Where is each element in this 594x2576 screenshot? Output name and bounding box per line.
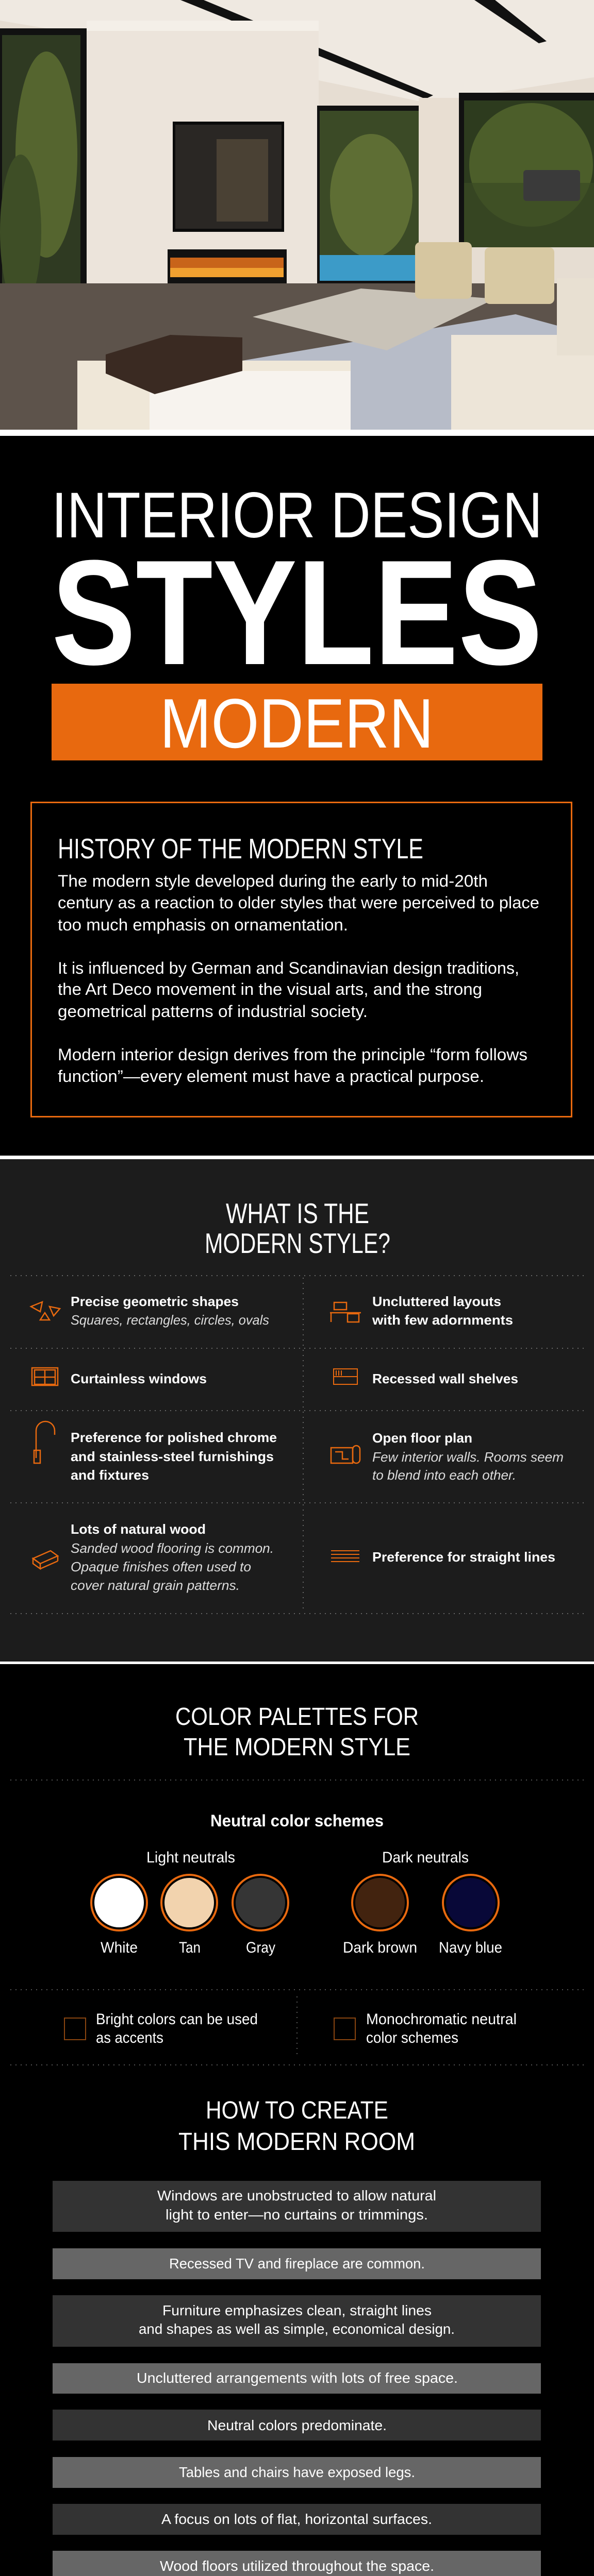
feature: uncluttered layouts: Uncluttered layouts xyxy=(372,1294,501,1309)
note: bright colors accents: Bright colors can be used xyxy=(96,2011,258,2028)
feature: curtainless windows xyxy=(32,1368,207,1386)
bar 5 xyxy=(53,2410,541,2441)
heading: what is the modern style xyxy=(205,1197,390,1259)
feature: natural wood xyxy=(33,1521,274,1593)
feature: open floor plan: Few interior walls. Rooms seem xyxy=(372,1449,564,1465)
feature: precise geometric shapes: Precise geometric shapes xyxy=(71,1294,239,1309)
feature: polished chrome: Preference for polished chrome xyxy=(71,1430,277,1445)
feature: polished chrome: and fixtures xyxy=(71,1467,149,1483)
history body: Modern interior design derives from the principle “form follows xyxy=(58,1045,527,1064)
feature: natural wood: Lots of natural wood xyxy=(71,1521,206,1537)
bar 3: and shapes as well as simple, economical design. xyxy=(139,2321,455,2337)
history body: century as a reaction to older styles that were perceived to place xyxy=(58,893,539,912)
swatch: gray xyxy=(233,1875,288,1956)
note: monochromatic xyxy=(334,2011,517,2046)
note: bright colors accents: as accents xyxy=(96,2029,163,2046)
note: bright colors accents xyxy=(64,2011,258,2046)
bar 1 xyxy=(53,2181,541,2232)
heading: what is the modern style: MODERN STYLE? xyxy=(205,1227,390,1259)
feature: natural wood: cover natural grain patterns. xyxy=(71,1578,240,1593)
group: light neutrals: Light neutrals xyxy=(146,1849,235,1866)
swatch: gray: Gray xyxy=(246,1939,275,1956)
heading: how to create: THIS MODERN ROOM xyxy=(178,2128,415,2156)
swatch: tan: Tan xyxy=(179,1939,201,1956)
feature: precise geometric shapes xyxy=(31,1294,269,1328)
bar 4: Uncluttered arrangements with lots of free space. xyxy=(137,2370,458,2386)
history body: function”—every element must have a practical purpose. xyxy=(58,1067,484,1086)
bar 2 xyxy=(53,2248,541,2279)
bar 3 xyxy=(53,2295,541,2347)
icon: faucet xyxy=(34,1421,55,1463)
swatch: white: White xyxy=(101,1939,138,1956)
icon: wood plank xyxy=(33,1551,58,1569)
bar 8: Wood floors utilized throughout the space. xyxy=(160,2558,434,2574)
group: dark neutrals xyxy=(343,1849,502,1956)
history body: It is influenced by German and Scandinavian design traditions, xyxy=(58,959,519,977)
history body: The modern style developed during the early to mid-20th xyxy=(58,872,488,890)
history body: too much emphasis on ornamentation. xyxy=(58,916,348,934)
group: dark neutrals: Dark neutrals xyxy=(382,1849,469,1866)
feature: polished chrome xyxy=(34,1421,277,1483)
feature: curtainless windows: Curtainless windows xyxy=(71,1371,207,1386)
icon: desk xyxy=(330,1302,361,1322)
swatch: navy blue xyxy=(439,1875,502,1956)
swatch: tan xyxy=(161,1875,217,1956)
bar 6: Tables and chairs have exposed legs. xyxy=(179,2464,415,2480)
bar 7: A focus on lots of flat, horizontal surfaces. xyxy=(161,2511,432,2527)
feature: natural wood: Opaque finishes often used to xyxy=(71,1559,251,1574)
title bar: MODERN xyxy=(52,684,542,762)
feature: uncluttered layouts: with few adornments xyxy=(372,1312,513,1328)
feature: precise geometric shapes: Squares, rectangles, circles, ovals xyxy=(71,1312,269,1328)
feature: recessed wall shelves xyxy=(334,1369,518,1386)
history body: the Art Deco movement in the visual arts, and the strong xyxy=(58,980,482,998)
icon: shapes xyxy=(31,1302,60,1320)
swatch: white xyxy=(91,1875,147,1956)
bar 2: Recessed TV and fireplace are common. xyxy=(169,2256,425,2272)
heading: color palettes xyxy=(175,1703,419,1761)
swatch: navy blue: Navy blue xyxy=(439,1939,502,1956)
bar 5: Neutral colors predominate. xyxy=(207,2417,387,2433)
bar 8 xyxy=(53,2551,541,2576)
bar 1: Windows are unobstructed to allow natural xyxy=(157,2188,436,2204)
feature: polished chrome: and stainless-steel furnishings xyxy=(71,1449,274,1464)
icon: lines xyxy=(331,1551,359,1562)
note: monochromatic: color schemes xyxy=(366,2029,458,2046)
feature: open floor plan: Open floor plan xyxy=(372,1430,472,1446)
icon: shelves xyxy=(334,1369,357,1384)
bar 6 xyxy=(53,2457,541,2488)
bar 4 xyxy=(53,2363,541,2394)
heading: how to create: HOW TO CREATE xyxy=(206,2097,388,2124)
swatch: dark brown: Dark brown xyxy=(343,1939,417,1956)
bar 1: light to enter—no curtains or trimmings. xyxy=(166,2207,428,2223)
group: light neutrals xyxy=(91,1849,288,1956)
hero photo xyxy=(0,0,594,430)
history heading: HISTORY OF THE MODERN STYLE xyxy=(58,833,423,865)
heading: what is the modern style: WHAT IS THE xyxy=(226,1197,369,1229)
swatch: dark brown xyxy=(343,1875,417,1956)
note: monochromatic: Monochromatic neutral xyxy=(366,2011,517,2028)
bar 7 xyxy=(53,2504,541,2535)
history body xyxy=(58,872,539,1086)
title bar: MODERN: MODERN xyxy=(160,684,434,762)
panel: history xyxy=(31,803,571,1117)
feature: straight lines: Preference for straight lines xyxy=(372,1549,555,1565)
heading: how to create xyxy=(178,2097,415,2156)
icon: blueprint xyxy=(331,1446,360,1463)
feature: open floor plan: to blend into each other. xyxy=(372,1467,516,1483)
feature: uncluttered layouts xyxy=(330,1294,513,1328)
subheading: neutral color schemes: Neutral color schemes xyxy=(210,1811,384,1830)
feature: natural wood: Sanded wood flooring is common. xyxy=(71,1540,274,1556)
history body: geometrical patterns of industrial society. xyxy=(58,1002,368,1021)
heading: color palettes: THE MODERN STYLE xyxy=(184,1734,410,1761)
bar 3: Furniture emphasizes clean, straight lines xyxy=(162,2302,432,2318)
feature: open floor plan xyxy=(331,1430,564,1483)
heading: color palettes: COLOR PALETTES FOR xyxy=(175,1703,419,1731)
feature: recessed wall shelves: Recessed wall shelves xyxy=(372,1371,518,1386)
icon: window xyxy=(32,1368,58,1385)
list: how to create bars xyxy=(53,2181,541,2576)
